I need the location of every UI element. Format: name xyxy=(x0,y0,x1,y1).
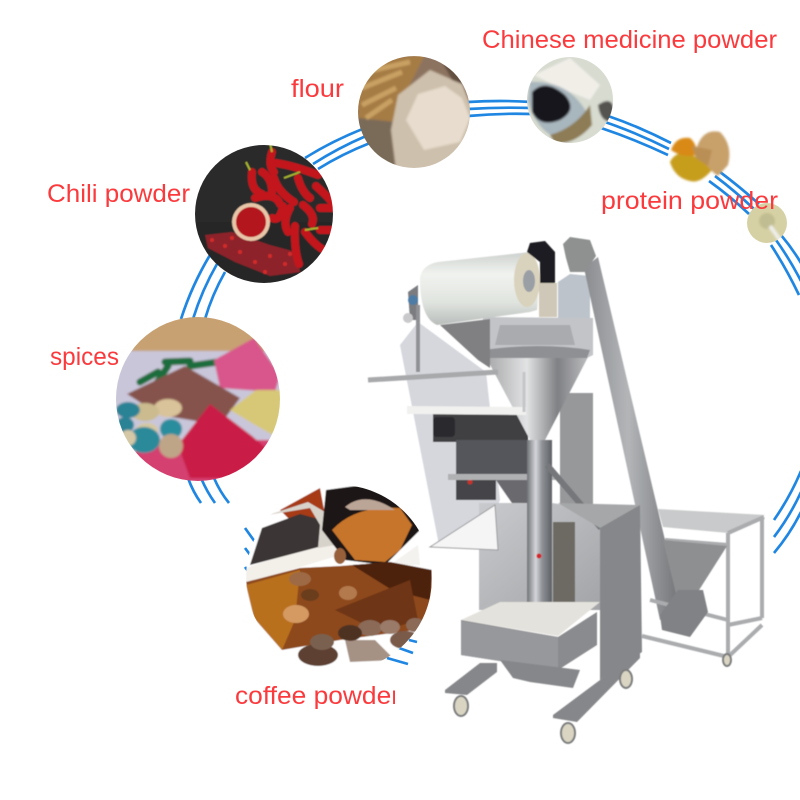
photo circle: chili powder xyxy=(195,145,333,283)
auger tube xyxy=(584,257,682,620)
tray xyxy=(461,602,600,636)
film bars xyxy=(368,372,558,477)
black motor xyxy=(527,241,555,284)
controller xyxy=(433,417,455,437)
feed hopper xyxy=(663,540,727,598)
label: spices: spices xyxy=(50,343,119,371)
packing machine xyxy=(368,237,765,743)
label mask: clipped final letter xyxy=(395,680,409,710)
film panel xyxy=(400,322,500,547)
label: coffee powder: coffee powder xyxy=(235,682,400,710)
translucent lower film xyxy=(430,505,498,550)
table top xyxy=(658,509,765,533)
filling cone xyxy=(486,357,588,440)
caster wheels xyxy=(454,654,731,743)
auger head xyxy=(563,237,596,272)
photo circle: protein powder xyxy=(747,203,787,243)
photo circle: Chinese medicine powder xyxy=(527,57,613,143)
label: protein powder: protein powder xyxy=(601,187,778,215)
base frame xyxy=(445,650,640,722)
label: Chili powder: Chili powder xyxy=(47,180,190,208)
control box xyxy=(433,412,531,503)
brass cylinder xyxy=(539,283,557,317)
sealer unit xyxy=(553,522,575,604)
photo circle: flour xyxy=(356,55,472,172)
rear column xyxy=(560,393,593,505)
side panel xyxy=(600,505,642,680)
film roll xyxy=(403,252,540,372)
label: Chinese medicine powder: Chinese medicine powder xyxy=(482,26,777,54)
cabinet xyxy=(479,503,600,610)
forming tube xyxy=(527,440,552,606)
label: flour: flour xyxy=(291,75,344,103)
glass hopper bowl xyxy=(483,317,593,358)
table frame xyxy=(642,517,764,657)
diagonal strut xyxy=(547,465,601,528)
photo: turmeric xyxy=(670,131,729,182)
lower auger drive xyxy=(660,590,708,637)
auger bottle xyxy=(558,274,590,318)
ring: blue triple arcs xyxy=(181,101,800,664)
photo circle: coffee powder xyxy=(244,484,434,680)
red indicator xyxy=(536,554,542,558)
photo circle: spices xyxy=(116,317,280,481)
